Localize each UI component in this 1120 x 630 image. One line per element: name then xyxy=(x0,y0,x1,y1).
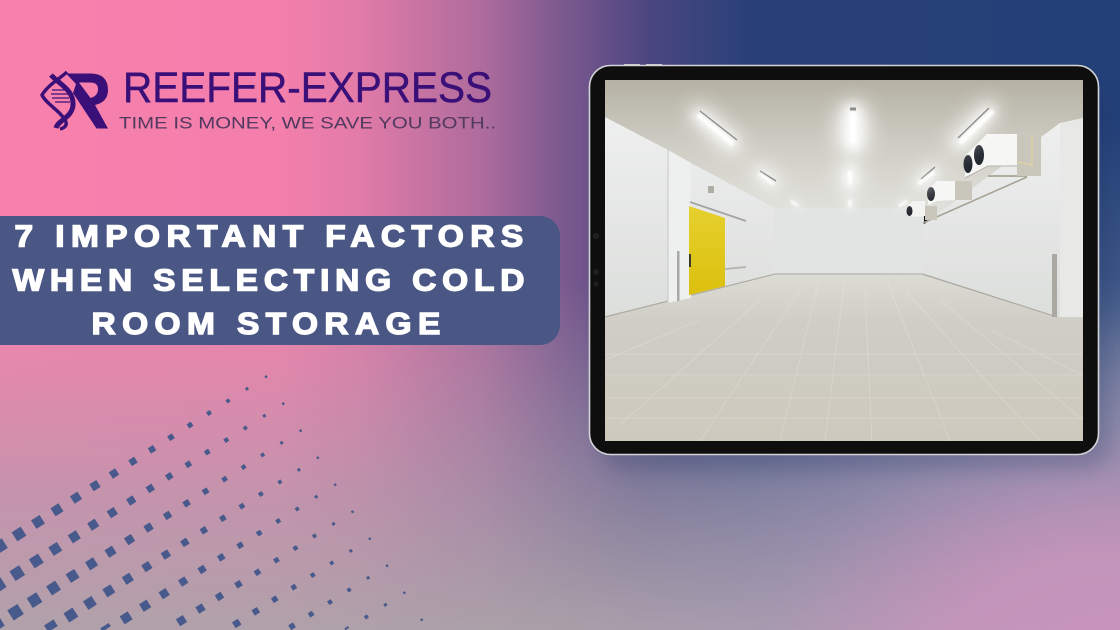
dotted halftone pattern xyxy=(0,376,428,629)
ceiling light glows xyxy=(699,110,988,184)
yellow sliding door xyxy=(689,206,725,295)
banner background xyxy=(0,216,560,345)
brand name: REEFER-EXPRESS xyxy=(123,64,492,112)
cooling unit medium xyxy=(927,181,972,205)
icon: R monogram with DNA helix xyxy=(42,72,108,129)
tablet shadow xyxy=(600,85,1110,470)
exit sign xyxy=(708,186,714,193)
left wall xyxy=(605,117,775,320)
title text: 7 IMPORTANT FACTORS xyxy=(14,219,523,253)
cooling unit small xyxy=(906,201,937,220)
ceiling xyxy=(605,80,1083,215)
back wall xyxy=(774,208,924,275)
tablet camera and sensors xyxy=(593,233,599,286)
tablet top buttons xyxy=(624,64,662,65)
pipe along right wall xyxy=(923,177,1027,223)
ceiling light tubes xyxy=(698,111,993,207)
light fixture housings xyxy=(700,108,989,181)
door rail xyxy=(690,202,746,221)
title text: ROOM STORAGE xyxy=(92,306,440,341)
tagline: TIME IS MONEY, WE SAVE YOU BOTH.. xyxy=(119,114,496,132)
tablet mockup xyxy=(590,64,1110,470)
title text: WHEN SELECTING COLD xyxy=(12,263,524,297)
right pillar xyxy=(1060,118,1083,317)
title text xyxy=(12,219,524,341)
tablet body xyxy=(590,66,1098,454)
title banner xyxy=(0,216,560,345)
photo: cold storage room xyxy=(605,80,1083,441)
wall base lines xyxy=(605,274,1057,317)
logo: Reefer-Express xyxy=(42,64,496,132)
floor tile lines xyxy=(605,276,1083,441)
floor xyxy=(605,274,1083,441)
left pillar xyxy=(668,150,691,303)
right wall xyxy=(923,123,1060,318)
cooling unit large xyxy=(964,134,1041,178)
